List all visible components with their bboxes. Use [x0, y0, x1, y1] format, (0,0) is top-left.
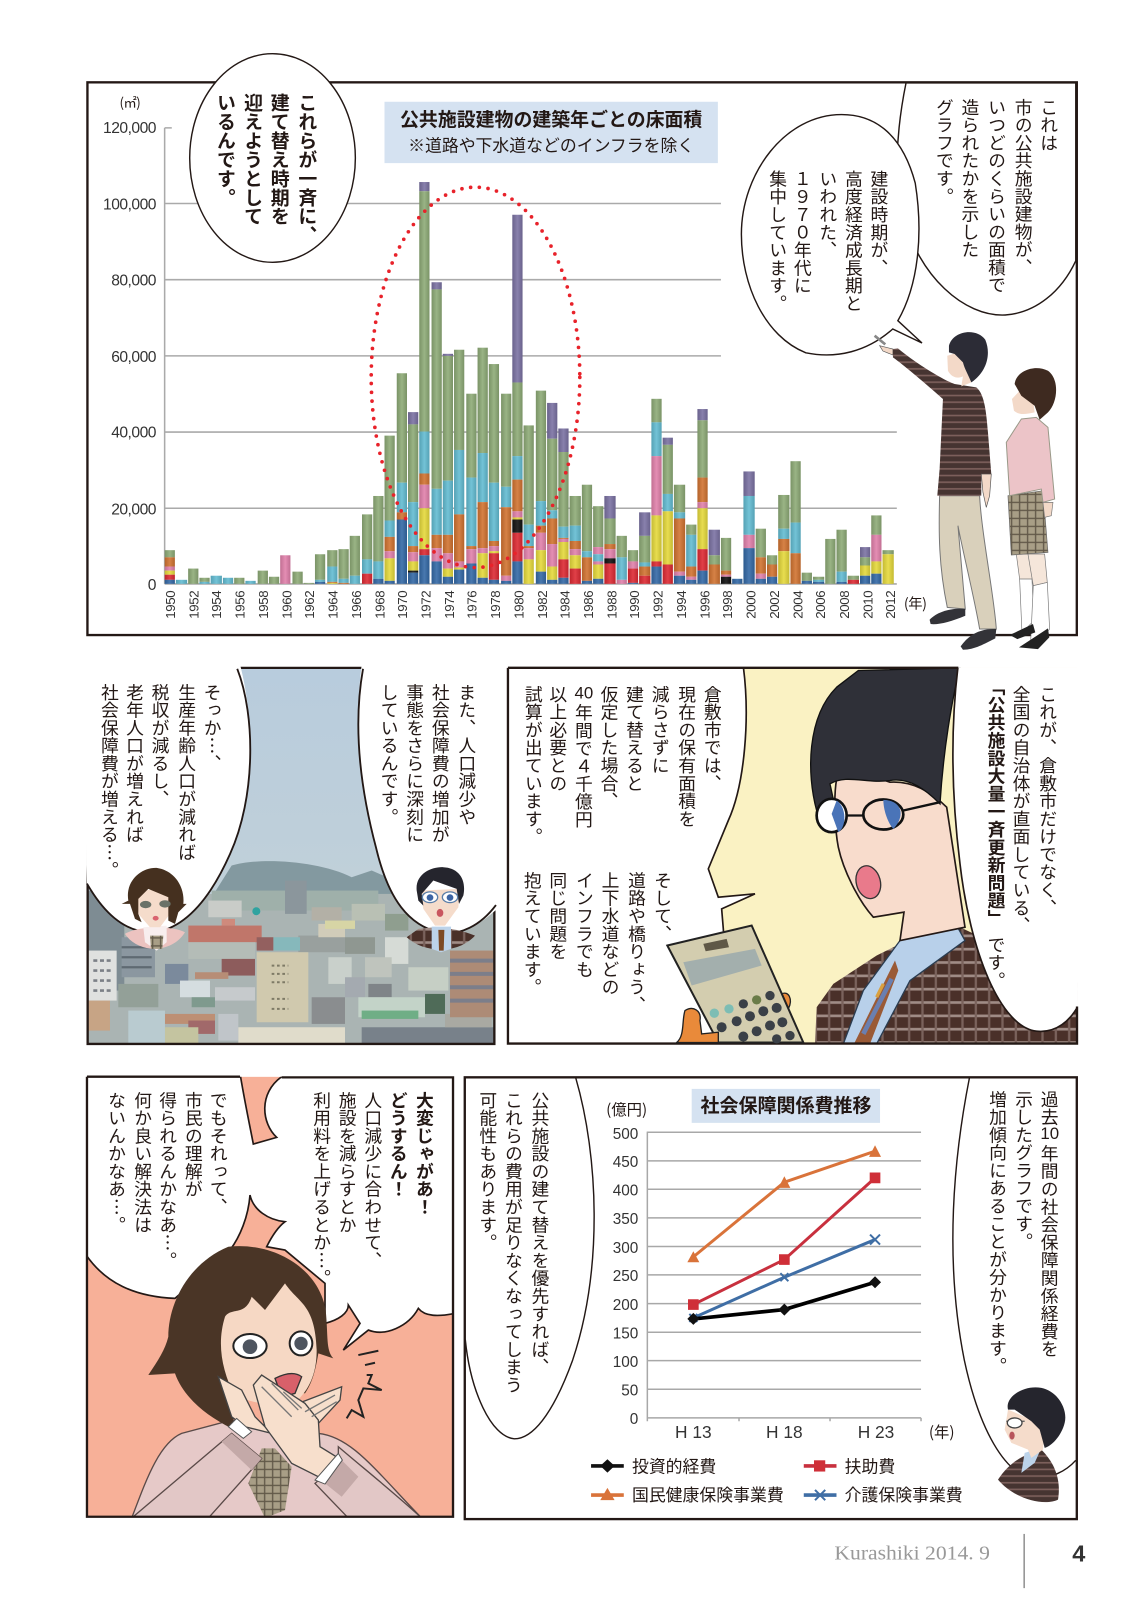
speech text: understanding: でもそれって、: [206, 1091, 232, 1216]
speech text: understanding: 何か良い解決法は: [130, 1091, 156, 1233]
x axis year labels: 2006: [813, 591, 828, 619]
chart title box: [384, 102, 718, 163]
large man portrait: [811, 668, 1080, 1044]
x axis year labels: 1986: [581, 591, 596, 619]
speech text: infrastructure: [520, 871, 676, 1014]
x axis year labels: 2010: [860, 591, 875, 619]
x axis year labels: 1976: [465, 591, 480, 619]
white speech bubble areas: [82, 654, 501, 933]
speech text: social security: しているんです。: [377, 683, 403, 825]
speech text: social security: [377, 683, 480, 843]
speech text: infrastructure: 上下水道などの: [597, 871, 623, 996]
x axis year labels: 1974: [442, 591, 457, 619]
speech bubble: construction period: [741, 115, 922, 355]
y axis labels: 100,000: [103, 197, 157, 214]
stacked bar chart: [165, 73, 911, 584]
x axis year labels: (年): [904, 592, 927, 613]
left speech bubble: 可能性もあります。: [475, 1091, 501, 1251]
speech text: Kurashiki estimate: 倉敷市では、: [700, 685, 726, 792]
speech text: Kurashiki estimate: 仮定した場合、: [596, 685, 622, 810]
speech bubble: this graph: これは: [1036, 98, 1062, 152]
value labels: 150: [613, 1326, 638, 1343]
value labels: 300: [613, 1240, 638, 1257]
speech bubble: this graph: 市の公共施設建物が、: [1011, 98, 1037, 276]
x axis year labels: 2008: [837, 591, 852, 619]
category labels: (年): [929, 1421, 955, 1443]
x axis year labels: 2002: [767, 591, 782, 619]
speech text: working-age population: 税収が減るし、: [148, 683, 174, 808]
x axis year labels: 1970: [395, 591, 410, 619]
panel: social security costs: [465, 1077, 1077, 1519]
chart title box: ※道路や下水道などのインフラを除く: [408, 131, 694, 156]
y axis labels: 80,000: [111, 272, 157, 289]
panel: city photo: [82, 654, 501, 1044]
speech bubble: this graph: 造られたかを示した: [957, 98, 983, 258]
value labels: 400: [613, 1183, 638, 1200]
value labels: 500: [613, 1126, 638, 1143]
speech text: Kurashiki estimate: 試算が出ています。: [521, 685, 547, 845]
right speech bubble: 年間の社会保障関係経費を: [1037, 1144, 1063, 1358]
value labels: 350: [613, 1211, 638, 1228]
x axis year labels: 1954: [209, 591, 224, 619]
speech text: infrastructure: 抱えています。: [520, 871, 546, 996]
panel: calculator man: [507, 664, 1080, 1044]
category labels: H 18: [766, 1422, 803, 1442]
speech bubbles: [85, 1073, 455, 1350]
speech text: Kurashiki estimate: 以上必要との: [545, 685, 571, 792]
legend: 介護保険事業費: [845, 1481, 963, 1506]
legend: 投資的経費: [632, 1453, 716, 1478]
line chart: (億円): [606, 1098, 647, 1120]
speech text: working-age population: 社会保障費が増える…。: [97, 683, 123, 879]
speech text: big trouble: 施設を減らすとか: [335, 1091, 361, 1233]
right speech bubble: [953, 664, 1078, 1031]
x axis year labels: 1960: [279, 591, 294, 619]
line chart: [606, 1089, 955, 1443]
right speech bubble: [953, 1078, 1076, 1478]
speech text: Kurashiki estimate: 40: [575, 683, 593, 702]
speech text: understanding: 市民の理解が: [181, 1091, 207, 1198]
x axis year labels: 1990: [627, 591, 642, 619]
x axis year labels: 1984: [558, 591, 573, 619]
speech bubble: construction period: 建設時期が、: [866, 169, 892, 277]
y axis labels: 120,000: [103, 120, 157, 137]
panel: surprised woman: [85, 1073, 455, 1518]
legend: 国民健康保険事業費: [632, 1481, 784, 1506]
speech text: infrastructure: そして、: [650, 871, 676, 942]
y axis labels: 40,000: [111, 425, 157, 442]
speech text: big trouble: [309, 1091, 438, 1287]
calculator and hand: [667, 926, 803, 1044]
y axis labels: 20,000: [111, 501, 157, 518]
speech bubble: construction period: いわれた、: [815, 170, 841, 259]
left speech bubble: これらの費用が足りなくなってしまう: [501, 1091, 527, 1394]
speech bubble: all at once: 建て替え時期を: [267, 93, 294, 225]
speech text: big trouble: 大変じゃがあ！: [412, 1091, 438, 1216]
speech text: working-age population: 老年人口が増えれば: [122, 683, 148, 843]
speech text: big trouble: 利用料を上げるとか…。: [309, 1091, 335, 1287]
x axis year labels: 1978: [488, 591, 503, 619]
figures: man pointing and woman: [875, 332, 1056, 650]
speech text: big trouble: 人口減少に合わせて、: [360, 1091, 386, 1269]
right speech bubble: 10: [1040, 1124, 1059, 1143]
speech text: Kurashiki estimate: 現在の保有面積を: [674, 685, 700, 827]
value labels: 0: [630, 1411, 638, 1428]
small man portrait: [407, 867, 475, 952]
y axis labels: 60,000: [111, 349, 157, 366]
page footer: 4: [1072, 1541, 1085, 1567]
speech text: nationwide problem: これが、倉敷市だけでなく、: [1035, 685, 1061, 916]
speech bubble: construction period: 集中しています。: [765, 169, 791, 312]
x axis year labels: 1950: [163, 591, 178, 619]
surprised woman: [132, 1246, 422, 1518]
value labels: 250: [613, 1268, 638, 1285]
speech text: working-age population: 生産年齢人口が減れば: [174, 683, 200, 861]
speech text: working-age population: [97, 683, 226, 879]
x axis year labels: 1972: [419, 591, 434, 619]
yellow background: [709, 669, 972, 1042]
right speech bubble: 増加傾向にあることが分かります。: [985, 1090, 1011, 1375]
speech text: social security: また、人口減少や: [454, 683, 480, 825]
speech bubble: all at once: これらが一斉に、: [294, 93, 321, 244]
x axis year labels: 1964: [325, 591, 340, 619]
speech text: big trouble: どうするん！: [386, 1091, 412, 1198]
x axis year labels: 1992: [651, 591, 666, 619]
red dotted ellipse: [371, 187, 580, 568]
small woman portrait: [122, 868, 187, 951]
chart title box: 公共施設建物の建築年ごとの床面積: [400, 105, 702, 132]
value labels: 200: [613, 1297, 638, 1314]
speech text: understanding: [104, 1091, 232, 1269]
x axis year labels: 2000: [744, 591, 759, 619]
speech text: understanding: 得られるんかなあ…。: [155, 1091, 181, 1269]
speech text: infrastructure: 道路や橋りょう、: [624, 871, 650, 1014]
speech text: social security: 社会保障費の増加が: [428, 683, 454, 843]
x axis year labels: 2012: [883, 591, 898, 619]
speech bubble: construction period: 高度経済成長期と: [841, 169, 867, 312]
speech bubble: this graph: グラフです。: [932, 98, 958, 205]
panel: floor area by construction year: [87, 54, 1077, 650]
left speech bubble: [507, 666, 755, 1044]
x axis year labels: 1966: [349, 591, 364, 619]
x axis year labels: 1962: [302, 591, 317, 619]
x axis year labels: 1956: [232, 591, 247, 619]
speech bubble: all at once: いるんです。: [213, 93, 240, 207]
surprise squiggle: [347, 1351, 382, 1418]
right speech bubble: 過去: [1037, 1090, 1063, 1126]
category labels: H 23: [858, 1422, 894, 1442]
x axis year labels: 1982: [535, 591, 550, 619]
x axis year labels: 1998: [720, 591, 735, 619]
speech bubble: all at once: [190, 54, 355, 262]
speech text: social security: 事態をさらに深刻に: [402, 683, 428, 843]
value labels: 100: [613, 1354, 638, 1371]
right speech bubble: 示したグラフです。: [1011, 1090, 1037, 1250]
x axis year labels: 1958: [256, 591, 271, 619]
value labels: 450: [613, 1154, 638, 1171]
speech text: nationwide problem: 「公共施設大量一斉更新問題」: [984, 678, 1010, 927]
speech text: infrastructure: 同じ問題を: [545, 871, 571, 960]
legend: [591, 1453, 963, 1506]
speech text: Kurashiki estimate: 減らさずに: [648, 685, 674, 774]
speech bubble: this graph: [897, 83, 1076, 315]
category labels: [675, 1421, 955, 1443]
speech text: nationwide problem: です。: [984, 936, 1010, 989]
y axis labels: (㎡): [120, 92, 140, 111]
x axis year labels: [163, 591, 927, 619]
speech bubble: construction period: １９７０年代に: [790, 170, 816, 294]
left speech bubble: [465, 1078, 594, 1439]
series lines: [687, 1145, 881, 1325]
x axis year labels: 1988: [605, 591, 620, 619]
y axis labels: [103, 92, 157, 594]
x axis year labels: 2004: [791, 591, 806, 619]
speech text: understanding: ないんかなあ…。: [104, 1091, 130, 1233]
speech bubble outlines: [87, 669, 496, 933]
speech bubble: all at once: 迎えようとして: [240, 93, 267, 225]
speech text: infrastructure: インフラでも: [572, 871, 598, 978]
page footer: [834, 1534, 1085, 1588]
speech text: working-age population: そっか…、: [200, 683, 226, 772]
page footer: Kurashiki 2014. 9: [834, 1542, 990, 1564]
x axis year labels: 1968: [372, 591, 387, 619]
x axis year labels: 1952: [186, 591, 201, 619]
speech bubble: this graph: いつどのくらいの面積で: [984, 98, 1010, 294]
small man portrait: [998, 1387, 1065, 1502]
photo of Kurashiki: [85, 668, 495, 1044]
value labels: 50: [621, 1383, 638, 1400]
legend: 扶助費: [845, 1453, 895, 1478]
left speech bubble: 公共施設の建て替えを優先すれば、: [527, 1091, 553, 1376]
chart title: 社会保障関係費推移: [701, 1091, 872, 1118]
category labels: H 13: [675, 1422, 712, 1442]
x axis year labels: 1994: [674, 591, 689, 619]
speech text: nationwide problem: 全国の自治体が直面している、: [1009, 685, 1035, 934]
y axis labels: 0: [148, 577, 157, 594]
speech text: Kurashiki estimate: 年間で４千億円: [571, 703, 597, 829]
speech text: nationwide problem: [984, 678, 1061, 989]
speech text: Kurashiki estimate: [521, 683, 726, 845]
x axis year labels: 1980: [512, 591, 527, 619]
value labels: [613, 1126, 638, 1428]
speech text: Kurashiki estimate: 建て替えると: [622, 685, 648, 792]
x axis year labels: 1996: [698, 591, 713, 619]
